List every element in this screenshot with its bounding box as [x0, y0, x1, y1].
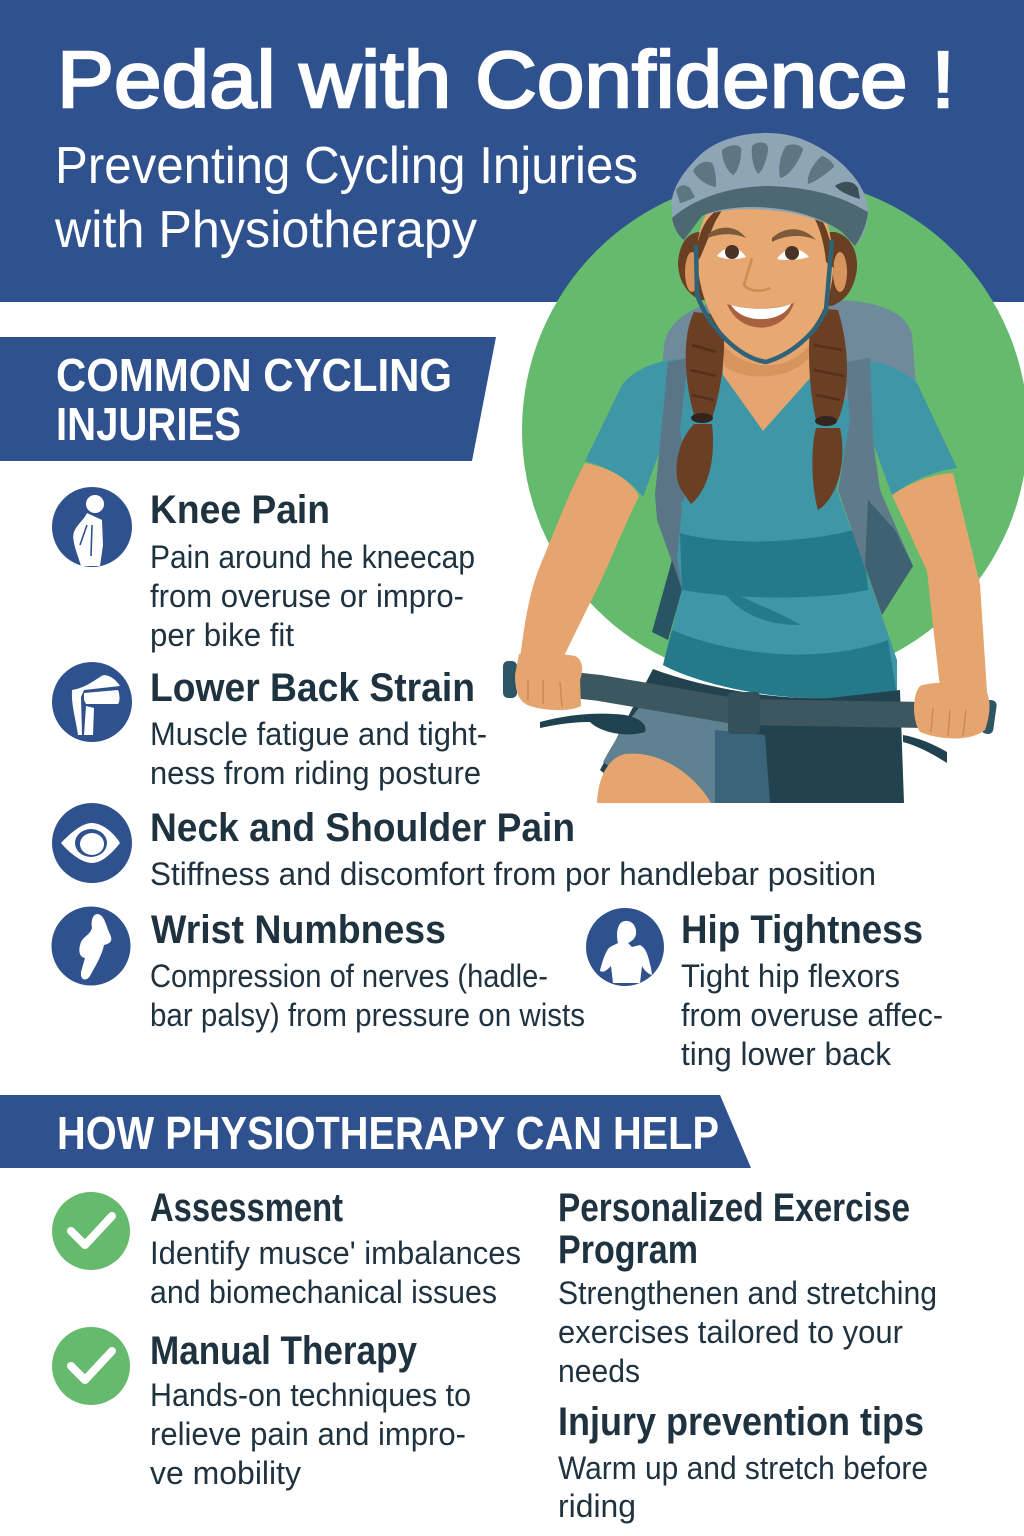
- left hand: [515, 653, 582, 710]
- icon: wrist: [52, 906, 130, 986]
- right arm: [892, 473, 987, 692]
- injury: hip tightness: [586, 908, 943, 1072]
- help: injury prevention tips: [558, 1400, 928, 1524]
- backpack strap right: [838, 358, 913, 615]
- injury: wrist numbness: bar palsy) from pressure on wists: [150, 997, 585, 1033]
- injury: wrist numbness: Compression of nerves (hadle-: [150, 958, 548, 994]
- shirt shadow bands: [663, 528, 897, 698]
- icon: torso: [586, 908, 664, 986]
- nose: [744, 258, 770, 291]
- injury: knee pain: [52, 487, 475, 653]
- eyes: [717, 245, 809, 260]
- subtitle: with Physiotherapy: [54, 201, 477, 259]
- handlebar: [503, 661, 997, 763]
- help: personalized exercise program: Personalized Exercise: [558, 1186, 910, 1230]
- section heading: common cycling injuries: INJURIES: [56, 398, 241, 450]
- help: manual therapy: [52, 1327, 471, 1491]
- smile: [727, 303, 794, 328]
- icon: eye: [52, 803, 132, 883]
- injury: wrist numbness: [52, 906, 585, 1033]
- injury: neck and shoulder pain: Neck and Shoulder Pain: [150, 806, 575, 850]
- backpack: [652, 300, 916, 640]
- subtitle: [54, 137, 638, 259]
- injury: knee pain: from overuse or impro-: [150, 578, 464, 614]
- section heading: common cycling injuries: [0, 337, 496, 461]
- help: personalized exercise program: [558, 1186, 937, 1389]
- hair behind head: [678, 232, 857, 306]
- left arm: [520, 463, 639, 658]
- face: [698, 209, 833, 335]
- injury: lower back strain: [52, 662, 487, 791]
- icon: bent figure: [52, 487, 132, 567]
- help: assessment: Assessment: [150, 1186, 343, 1230]
- helmet: [671, 133, 868, 246]
- eyebrows: [708, 228, 816, 242]
- injury: knee pain: Pain around he kneecap: [150, 539, 475, 575]
- help: manual therapy: ve mobility: [150, 1455, 301, 1491]
- help: assessment: and biomechanical issues: [150, 1274, 497, 1310]
- injury: lower back strain: Muscle fatigue and tight-: [150, 716, 487, 752]
- title: Pedal with Confidence !: [57, 35, 955, 124]
- injury: hip tightness: from overuse affec-: [681, 997, 943, 1033]
- injury: neck and shoulder pain: [52, 803, 876, 892]
- help: personalized exercise program: exercises tailored to your: [558, 1314, 903, 1350]
- icon: check: [52, 1192, 130, 1270]
- help: injury prevention tips: Injury prevention tips: [558, 1400, 924, 1444]
- injury: knee pain: per bike fit: [150, 617, 294, 653]
- help: manual therapy: relieve pain and impro-: [150, 1416, 466, 1452]
- injury: knee pain: Knee Pain: [150, 488, 330, 532]
- help: injury prevention tips: riding: [558, 1488, 636, 1524]
- help: assessment: [52, 1186, 521, 1310]
- help: personalized exercise program: needs: [558, 1353, 640, 1389]
- help: assessment: Identify musce' imbalances: [150, 1235, 521, 1271]
- hair fringe: [698, 211, 834, 268]
- injury: lower back strain: ness from riding posture: [150, 755, 481, 791]
- injury: wrist numbness: Wrist Numbness: [151, 908, 446, 952]
- left braid: [676, 312, 724, 504]
- injury: hip tightness: Hip Tightness: [681, 908, 923, 952]
- ears: [685, 252, 847, 292]
- subtitle: Preventing Cycling Injuries: [55, 137, 638, 195]
- green circle behind cyclist: [522, 177, 1024, 683]
- icon: check: [52, 1327, 130, 1405]
- help: personalized exercise program: Strengthenen and stretching: [558, 1275, 937, 1311]
- shorts and legs: [597, 669, 904, 803]
- illustration: cyclist: [503, 133, 997, 803]
- shirt: [585, 359, 957, 698]
- injury: hip tightness: Tight hip flexors: [681, 958, 900, 994]
- help: personalized exercise program: Program: [558, 1228, 698, 1272]
- right braid: [809, 308, 847, 510]
- section heading: common cycling injuries: COMMON CYCLING: [56, 349, 452, 401]
- injury: lower back strain: Lower Back Strain: [150, 666, 475, 710]
- help: manual therapy: Manual Therapy: [150, 1329, 418, 1373]
- backpack strap right shadow: [865, 500, 913, 615]
- neck: [723, 335, 812, 431]
- injury: neck and shoulder pain: Stiffness and discomfort from por handlebar position: [150, 856, 876, 892]
- icon: bent knee: [52, 662, 132, 742]
- right hand: [914, 683, 990, 738]
- section heading: how physiotherapy can help: [0, 1095, 751, 1168]
- help: injury prevention tips: Warm up and stretch before: [558, 1450, 928, 1486]
- header band: [0, 0, 1024, 302]
- help: manual therapy: Hands-on techniques to: [150, 1377, 471, 1413]
- helmet straps: [696, 240, 832, 362]
- backpack strap left: [655, 358, 686, 504]
- section heading: how physiotherapy can help: HOW PHYSIOTHERAPY CAN HELP: [57, 1107, 719, 1159]
- injury: hip tightness: ting lower back: [681, 1036, 892, 1072]
